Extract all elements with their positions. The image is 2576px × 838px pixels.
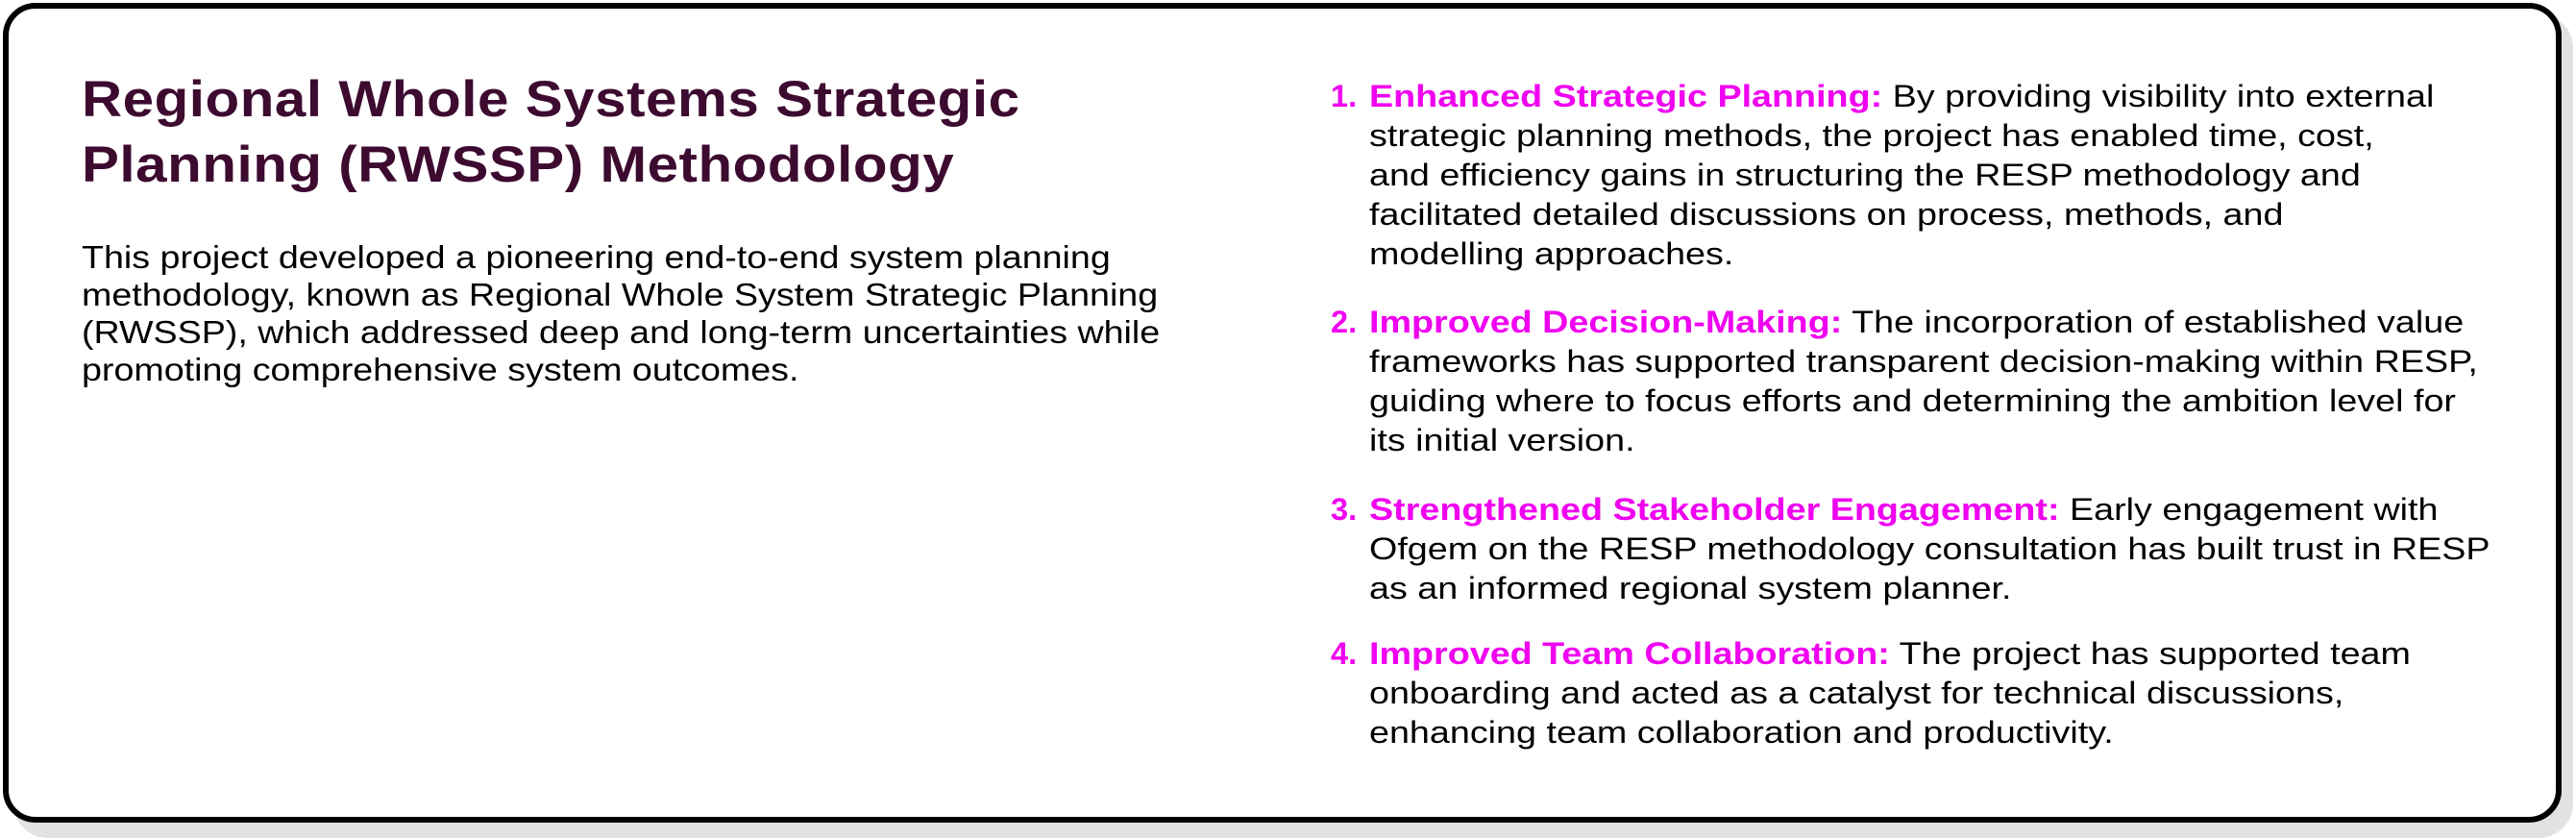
list item 1: Enhanced Strategic Planning: modelling approaches. bbox=[1369, 236, 1733, 271]
title: Regional Whole Systems Strategic bbox=[82, 71, 1020, 128]
list item 2: Improved Decision-Making: Improved Decision-Making: The incorporation of established value bbox=[1369, 305, 2464, 339]
text block: intro paragraph: (RWSSP), which addressed deep and long-term uncertainties while bbox=[82, 314, 1160, 350]
list item 1: Enhanced Strategic Planning bbox=[1331, 79, 2434, 271]
list item 2: Improved Decision-Making: 2. bbox=[1331, 305, 1357, 339]
list item 4: Improved Team Collaboration: onboarding and acted as a catalyst for technical discussions, bbox=[1369, 676, 2343, 710]
list item 3: Strengthened Stakeholder Engagement: Ofgem on the RESP methodology consultation has built trust in RESP bbox=[1369, 531, 2490, 566]
list item 3: Strengthened Stakeholder Engagement: Strengthened Stakeholder Engagement: Early engagement with bbox=[1369, 492, 2438, 527]
text block: intro paragraph: promoting comprehensive system outcomes. bbox=[82, 352, 798, 387]
title bbox=[82, 71, 1020, 193]
list item 4: Improved Team Collaboration: Improved Team Collaboration: The project has supported team bbox=[1369, 636, 2411, 671]
list item 1: Enhanced Strategic Planning: 1. bbox=[1331, 79, 1357, 113]
list item 4: Improved Team Collaboration: 4. bbox=[1331, 636, 1357, 671]
list item 4: Improved Team Collaboration bbox=[1331, 636, 2411, 750]
list item 3: Strengthened Stakeholder Engagement: 3. bbox=[1331, 492, 1357, 527]
list item 4: Improved Team Collaboration: enhancing team collaboration and productivity. bbox=[1369, 715, 2114, 750]
list item 3: Strengthened Stakeholder Engagement: as an informed regional system planner. bbox=[1369, 571, 2012, 605]
list item 1: Enhanced Strategic Planning: Enhanced Strategic Planning: By providing visibility into external bbox=[1369, 79, 2434, 113]
list item 1: Enhanced Strategic Planning: strategic planning methods, the project has enabled time, cost, bbox=[1369, 118, 2374, 153]
title: Planning (RWSSP) Methodology bbox=[82, 136, 954, 193]
list item 1: Enhanced Strategic Planning: facilitated detailed discussions on process, methods, and bbox=[1369, 197, 2283, 232]
text block: intro paragraph: methodology, known as Regional Whole System Strategic Planning bbox=[82, 277, 1158, 312]
list item 2: Improved Decision-Making: frameworks has supported transparent decision-making within RESP, bbox=[1369, 344, 2478, 379]
list item 1: Enhanced Strategic Planning: and efficiency gains in structuring the RESP methodology and bbox=[1369, 158, 2361, 192]
list item 2: Improved Decision-Making bbox=[1331, 305, 2478, 457]
list item 3: Strengthened Stakeholder Engagement bbox=[1331, 492, 2490, 605]
text block: intro paragraph: This project developed a pioneering end-to-end system planning bbox=[82, 239, 1111, 275]
list item 2: Improved Decision-Making: guiding where to focus efforts and determining the ambition level for bbox=[1369, 383, 2456, 418]
text block: intro paragraph bbox=[82, 239, 1160, 387]
list item 2: Improved Decision-Making: its initial version. bbox=[1369, 423, 1635, 457]
